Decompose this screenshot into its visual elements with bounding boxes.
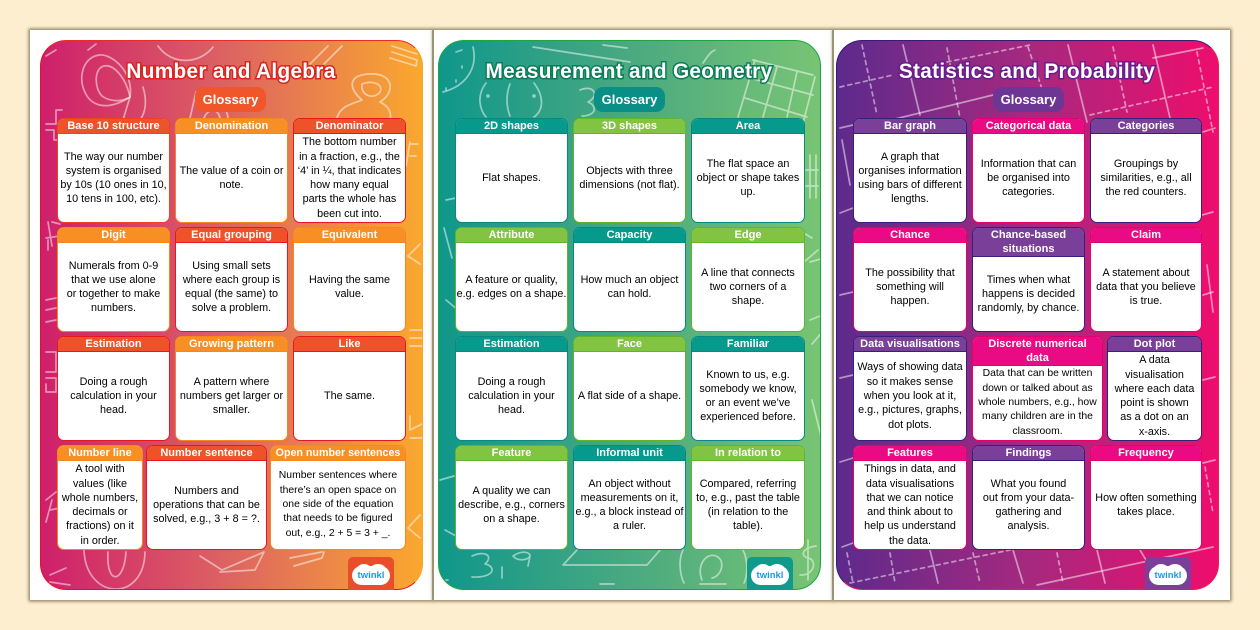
- card: Dot plot: A data: [1139, 354, 1170, 366]
- card: Informal unit: a ruler.: [613, 520, 646, 532]
- card: Chance-based situations: [972, 227, 1085, 332]
- card: Data visualisations: Data visualisations: [860, 338, 960, 350]
- card: Denominator: [293, 118, 406, 223]
- card: Findings: analysis.: [1007, 520, 1050, 532]
- card: Open number sentences: that needs to be figured: [283, 513, 393, 524]
- card: Informal unit: [573, 445, 686, 550]
- card: Data visualisations: when you look at it,: [864, 390, 956, 402]
- card: Estimation: Estimation: [483, 338, 540, 350]
- card: Attribute: e.g. edges on a shape.: [457, 288, 566, 300]
- card: Features: and think about to: [867, 506, 953, 518]
- card: Chance: something will: [876, 281, 944, 293]
- card: Familiar: experienced before.: [700, 411, 796, 423]
- card: Digit: Digit: [101, 229, 126, 241]
- paper sheet: measurement and geometry: [434, 30, 832, 600]
- card: Capacity: How much an object: [581, 274, 678, 286]
- card: Number line: in order.: [80, 535, 120, 547]
- card: Number line: decimals or: [72, 506, 128, 518]
- card: Chance: Chance: [890, 229, 930, 241]
- card: Categorical data: Categorical data: [986, 120, 1071, 132]
- card: Claim: A statement about: [1102, 267, 1190, 279]
- card: Edge: A line that connects: [701, 267, 795, 279]
- paper sheet: number and algebra: [30, 30, 432, 600]
- card: Dot plot: where each data: [1115, 383, 1194, 395]
- card: Categorical data: [972, 118, 1085, 223]
- geometry doodles: [439, 44, 820, 585]
- card: Categories: Categories: [1118, 120, 1174, 132]
- card: Discrete numerical data: Discrete numerical: [988, 338, 1087, 350]
- card: Base 10 structure: system is organised: [66, 165, 161, 177]
- card: Open number sentences: there’s an open space on: [280, 485, 396, 496]
- card: Discrete numerical data: data: [1026, 352, 1049, 364]
- card: Capacity: can hold.: [608, 288, 651, 300]
- card: Area: Area: [736, 120, 760, 132]
- card: 2D shapes: [455, 118, 568, 223]
- card: Feature: on a shape.: [483, 513, 540, 525]
- card: Denomination: [175, 118, 288, 223]
- card: Claim: [1090, 227, 1202, 332]
- card: Area: up.: [740, 186, 756, 198]
- card: Discrete numerical data: classroom.: [1012, 426, 1063, 437]
- card: Denominator: Denominator: [316, 120, 383, 132]
- logo: twinkl on measurement and geometry: twinkl: [757, 570, 783, 581]
- card: Base 10 structure: [57, 118, 170, 223]
- card: Number line: whole numbers,: [62, 492, 138, 504]
- card: Denomination: note.: [219, 179, 244, 191]
- card: Bar graph: using bars of different: [858, 179, 962, 191]
- card: Open number sentences: [270, 445, 406, 550]
- title: Number and Algebra: [126, 60, 336, 82]
- card: Chance-based situations: Times when what: [987, 274, 1070, 286]
- card: Equal grouping: solve a problem.: [192, 302, 271, 314]
- card: Growing pattern: [175, 336, 288, 441]
- card: Features: that we can notice: [866, 492, 954, 504]
- card: Denominator: The bottom number: [302, 136, 397, 148]
- card: Dot plot: x-axis.: [1139, 426, 1170, 438]
- card: Number line: Number line: [68, 447, 132, 459]
- card: Estimation: Estimation: [85, 338, 142, 350]
- card: In relation to: In relation to: [715, 447, 781, 459]
- logo: twinkl on number and algebra: [348, 557, 394, 590]
- card: Chance: happen.: [890, 295, 930, 307]
- card: Growing pattern: Growing pattern: [189, 338, 274, 350]
- maths doodles: [45, 43, 422, 589]
- card: Informal unit: measurements on it,: [581, 492, 678, 504]
- card: Bar graph: lengths.: [891, 193, 929, 205]
- card: Growing pattern: A pattern where: [194, 376, 269, 388]
- panel: number and algebra background: [40, 40, 423, 590]
- card: Familiar: Familiar: [727, 338, 769, 350]
- card: Feature: describe, e.g., corners: [458, 499, 565, 511]
- card: Features: data visualisations: [866, 478, 954, 490]
- card: 3D shapes: [573, 118, 686, 223]
- card: Frequency: takes place.: [1117, 506, 1175, 518]
- card: Number line: A tool with: [75, 463, 125, 475]
- card: Frequency: [1090, 445, 1202, 550]
- card: Like: The same.: [324, 390, 375, 402]
- card: Claim: is true.: [1130, 295, 1162, 307]
- card: Equal grouping: equal (the same) to: [185, 288, 278, 300]
- card: 3D shapes: 3D shapes: [602, 120, 657, 132]
- card: Estimation: [57, 336, 170, 441]
- card: Chance-based situations: Chance-based: [991, 229, 1066, 241]
- card: Dot plot: point is shown: [1120, 397, 1189, 409]
- card: Frequency: How often something: [1095, 492, 1197, 504]
- card: Edge: shape.: [732, 295, 764, 307]
- card: Base 10 structure: Base 10 structure: [67, 120, 160, 132]
- paper sheet: statistics and probability: [834, 30, 1230, 600]
- card: Informal unit: e.g., a block instead of: [575, 506, 684, 518]
- card: In relation to: table).: [733, 520, 763, 532]
- card: Findings: gathering and: [995, 506, 1062, 518]
- card: Digit: [57, 227, 170, 332]
- card: Informal unit: An object without: [588, 478, 671, 490]
- card: Discrete numerical data: down or talked about as: [982, 383, 1093, 394]
- card: In relation to: to, e.g., past the table: [696, 492, 800, 504]
- glossary label: measurement and geometry: Glossary: [602, 92, 657, 107]
- glossary label: number and algebra: Glossary: [203, 92, 258, 107]
- card: Features: [853, 445, 967, 550]
- card: Area: The flat space an: [707, 158, 789, 170]
- card: Dot plot: visualisation: [1125, 368, 1184, 380]
- glossary label: statistics and probability: [993, 87, 1064, 112]
- card: Attribute: Attribute: [489, 229, 534, 241]
- card: Familiar: Known to us, e.g.: [706, 368, 790, 380]
- card: Digit: or together to make: [67, 288, 160, 300]
- card: Base 10 structure: by 10s (10 ones in 10,: [60, 179, 167, 191]
- card: Dot plot: Dot plot: [1134, 338, 1175, 350]
- card: Dot plot: [1107, 336, 1202, 441]
- card: Estimation: [455, 336, 568, 441]
- card: Number line: fractions) on it: [66, 520, 134, 532]
- card: Features: the data.: [889, 535, 931, 547]
- card: Categorical data: Information that can: [981, 158, 1076, 170]
- card: Number sentence: [146, 445, 267, 550]
- card: Estimation: calculation in your: [70, 390, 157, 402]
- card: Feature: Feature: [492, 447, 531, 459]
- logo: twinkl on measurement and geometry: [747, 557, 793, 590]
- card: Denominator: how many equal: [310, 179, 389, 191]
- graph paper grid: [839, 44, 1216, 586]
- card: Data visualisations: so it makes sense: [867, 376, 953, 388]
- card: In relation to: [691, 445, 805, 550]
- card: Edge: [691, 227, 805, 332]
- card: Estimation: head.: [100, 404, 127, 416]
- card: Feature: [455, 445, 568, 550]
- card: Discrete numerical data: many children are in the: [982, 411, 1093, 422]
- logo: twinkl on number and algebra: twinkl: [358, 570, 384, 581]
- card: Bar graph: Bar graph: [884, 120, 936, 132]
- card: Open number sentences: one side of the equation: [283, 499, 393, 510]
- glossary label: statistics and probability: Glossary: [1001, 92, 1056, 107]
- card: Chance: The possibility that: [865, 267, 955, 279]
- card: Chance-based situations: situations: [1003, 243, 1054, 255]
- card: Number sentence: Numbers and: [174, 485, 239, 497]
- card: Denomination: Denomination: [195, 120, 268, 132]
- card: Bar graph: organises information: [858, 165, 962, 177]
- card: Findings: [972, 445, 1085, 550]
- card: Categories: similarities, e.g., all: [1100, 172, 1192, 184]
- card: Data visualisations: [853, 336, 967, 441]
- card: Area: [691, 118, 805, 223]
- card: Base 10 structure: 10 tens in 100, etc).: [66, 193, 161, 205]
- card: Like: [293, 336, 406, 441]
- glossary label: measurement and geometry: [594, 87, 665, 112]
- card: Equal grouping: Using small sets: [192, 260, 271, 272]
- card: Findings: Findings: [1006, 447, 1051, 459]
- card: Denominator: ‘4’ in ¼, that indicates: [298, 165, 401, 177]
- card: Estimation: head.: [498, 404, 525, 416]
- card: Chance-based situations: happens is decided: [982, 288, 1075, 300]
- card: Equivalent: [293, 227, 406, 332]
- card: Digit: Numerals from 0-9: [69, 260, 158, 272]
- card: 3D shapes: dimensions (not flat).: [579, 179, 680, 191]
- card: Frequency: Frequency: [1118, 447, 1174, 459]
- card: Data visualisations: dot plots.: [888, 419, 932, 431]
- card: Features: Things in data, and: [864, 463, 956, 475]
- card: Equivalent: Equivalent: [322, 229, 377, 241]
- card: Estimation: Doing a rough: [80, 376, 147, 388]
- logo: twinkl on statistics and probability: [1145, 557, 1191, 590]
- card: Discrete numerical data: [972, 336, 1103, 441]
- card: Categorical data: categories.: [1002, 186, 1055, 198]
- panel: statistics and probability background: [836, 40, 1219, 590]
- card: Attribute: A feature or quality,: [465, 274, 558, 286]
- logo: twinkl on statistics and probability: twinkl: [1155, 570, 1181, 581]
- card: 2D shapes: 2D shapes: [484, 120, 539, 132]
- card: Findings: What you found: [991, 478, 1066, 490]
- card: Informal unit: Informal unit: [596, 447, 663, 459]
- card: Categories: [1090, 118, 1202, 223]
- card: Edge: two corners of a: [710, 281, 786, 293]
- card: Number line: values (like: [73, 478, 127, 490]
- card: Familiar: or an event we’ve: [706, 397, 790, 409]
- card: Categories: the red counters.: [1105, 186, 1186, 198]
- card: In relation to: Compared, referring: [700, 478, 796, 490]
- card: Denomination: The value of a coin or: [180, 165, 283, 177]
- card: Number sentence: Number sentence: [160, 447, 253, 459]
- card: Equal grouping: where each group is: [183, 274, 280, 286]
- card: Discrete numerical data: whole numbers, e.g., how: [978, 397, 1097, 408]
- card: Face: [573, 336, 686, 441]
- card: Chance: [853, 227, 967, 332]
- card: Number sentence: operations that can be: [153, 499, 260, 511]
- card: Claim: Claim: [1131, 229, 1161, 241]
- card: Number sentence: solved, e.g., 3 + 8 = ?.: [153, 513, 260, 525]
- card: Familiar: [691, 336, 805, 441]
- card: Growing pattern: smaller.: [213, 404, 250, 416]
- card: Digit: that we use alone: [71, 274, 156, 286]
- card: Categories: Groupings by: [1114, 158, 1178, 170]
- card: 2D shapes: Flat shapes.: [482, 172, 541, 184]
- card: In relation to: (in relation to the: [708, 506, 788, 518]
- card: Data visualisations: Ways of showing data: [857, 361, 963, 373]
- card: Digit: numbers.: [91, 302, 136, 314]
- card: Edge: Edge: [735, 229, 761, 241]
- card: Base 10 structure: The way our number: [64, 150, 163, 162]
- card: Equivalent: Having the same: [309, 274, 390, 286]
- title: Statistics and Probability: [899, 60, 1155, 82]
- card: Denominator: in a fraction, e.g., the: [299, 150, 400, 162]
- card: Discrete numerical data: Data that can be written: [983, 368, 1092, 379]
- card: Categorical data: be organised into: [987, 172, 1070, 184]
- card: Chance-based situations: randomly, by chance.: [978, 302, 1079, 314]
- card: Face: Face: [617, 338, 642, 350]
- card: Dot plot: as a dot on an: [1120, 411, 1189, 423]
- card: Feature: A quality we can: [472, 485, 550, 497]
- panel: measurement and geometry background: [438, 40, 821, 590]
- card: Capacity: Capacity: [607, 229, 652, 241]
- card: 3D shapes: Objects with three: [586, 165, 673, 177]
- card: Open number sentences: Open number sentences: [276, 447, 400, 459]
- card: Features: Features: [887, 447, 933, 459]
- card: Estimation: calculation in your: [468, 390, 555, 402]
- card: Equivalent: value.: [335, 288, 364, 300]
- card: Data visualisations: e.g., pictures, graphs,: [858, 404, 962, 416]
- card: Area: object or shape takes: [697, 172, 799, 184]
- card: Equal grouping: [175, 227, 288, 332]
- card: Open number sentences: out, e.g., 2 + 5 = 3 + _.: [286, 528, 390, 539]
- title: Measurement and Geometry: [486, 60, 772, 82]
- card: Growing pattern: numbers get larger or: [180, 390, 283, 402]
- card: Estimation: Doing a rough: [478, 376, 545, 388]
- card: Open number sentences: Number sentences where: [279, 470, 397, 481]
- card: Number line: [57, 445, 143, 550]
- card: Features: help us understand: [864, 520, 956, 532]
- glossary label: number and algebra: [195, 87, 266, 112]
- card: Bar graph: [853, 118, 967, 223]
- card: Equal grouping: Equal grouping: [191, 229, 272, 241]
- card: Denominator: parts the whole has: [303, 193, 396, 205]
- card: Claim: data that you believe: [1096, 281, 1196, 293]
- card: Findings: out from your data-: [983, 492, 1074, 504]
- card: Attribute: [455, 227, 568, 332]
- card: Familiar: somebody we know,: [699, 383, 797, 395]
- card: Like: Like: [338, 338, 360, 350]
- card: Bar graph: A graph that: [881, 150, 939, 162]
- card: Denominator: been cut into.: [317, 208, 382, 220]
- card: Capacity: [573, 227, 686, 332]
- card: Face: A flat side of a shape.: [578, 390, 681, 402]
